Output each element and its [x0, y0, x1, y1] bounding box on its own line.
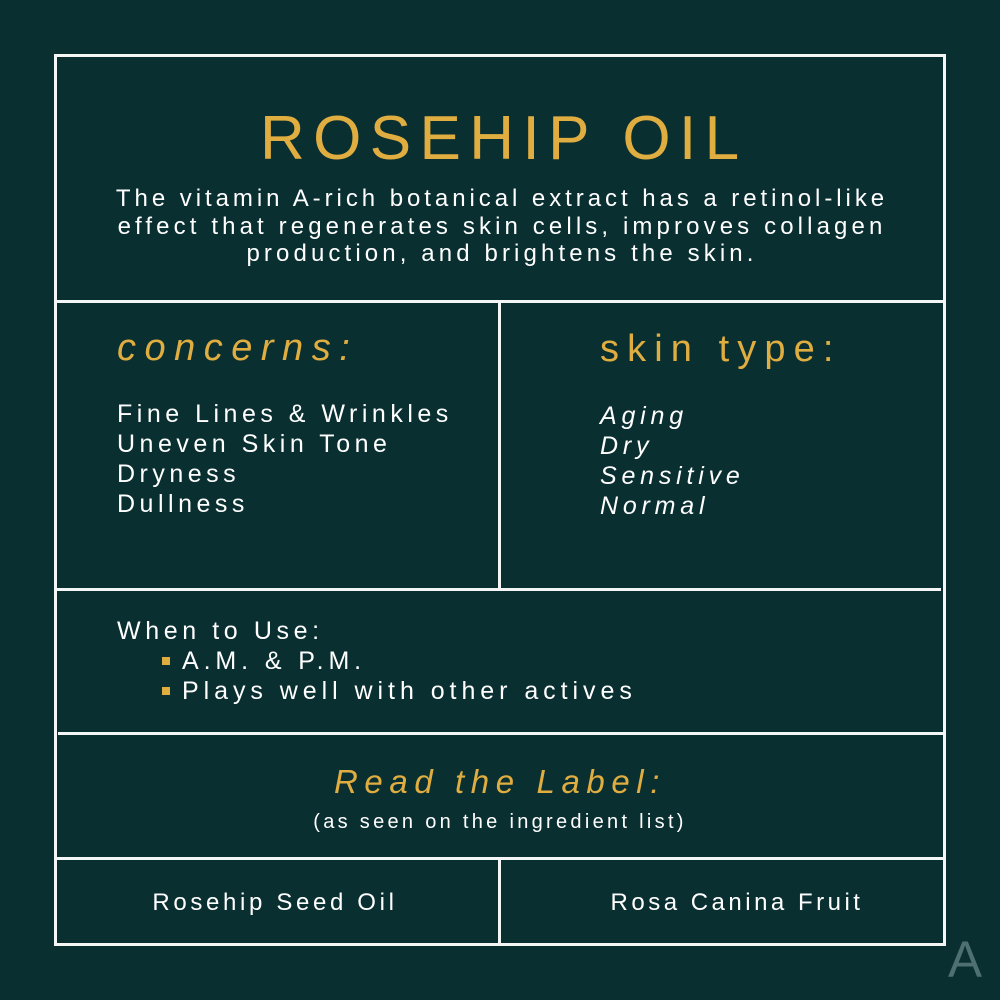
description: The vitamin A-rich botanical extract has a retinol-like — [116, 185, 888, 212]
ingredient name: rosa canina fruit: Rosa Canina Fruit — [611, 889, 863, 916]
skin type list — [598, 402, 745, 520]
concerns list: Uneven Skin Tone — [117, 430, 391, 458]
description — [116, 185, 888, 267]
description: production, and brightens the skin. — [246, 240, 758, 267]
panel: concerns — [117, 327, 453, 518]
panel: skin type — [598, 328, 842, 520]
bullet: plays well: Plays well with other actives — [182, 677, 637, 705]
concerns heading: concerns: — [117, 327, 358, 369]
concerns list: Dryness — [117, 460, 240, 488]
description: effect that regenerates skin cells, improves collagen — [118, 212, 886, 240]
skin type heading: skin type: — [600, 328, 842, 370]
skin type list: Dry — [600, 432, 653, 460]
ingredient name: rosehip seed oil: Rosehip Seed Oil — [152, 889, 398, 916]
when to use heading: When to Use: — [117, 617, 324, 645]
watermark logo: A — [948, 931, 982, 988]
skin type list: Aging — [600, 402, 688, 430]
title: ROSEHIP OIL — [260, 104, 748, 173]
skin type list: Sensitive — [600, 462, 745, 490]
concerns list: Dullness — [117, 490, 249, 518]
read the label heading: Read the Label: — [334, 763, 666, 800]
skin type list: Normal — [600, 492, 709, 520]
concerns list: Fine Lines & Wrinkles — [117, 400, 453, 428]
bullet: A.M. & P.M.: A.M. & P.M. — [182, 647, 366, 675]
label note: (as seen on the ingredient list) — [313, 811, 687, 833]
concerns list — [117, 400, 453, 518]
panel: when to use — [117, 617, 637, 705]
